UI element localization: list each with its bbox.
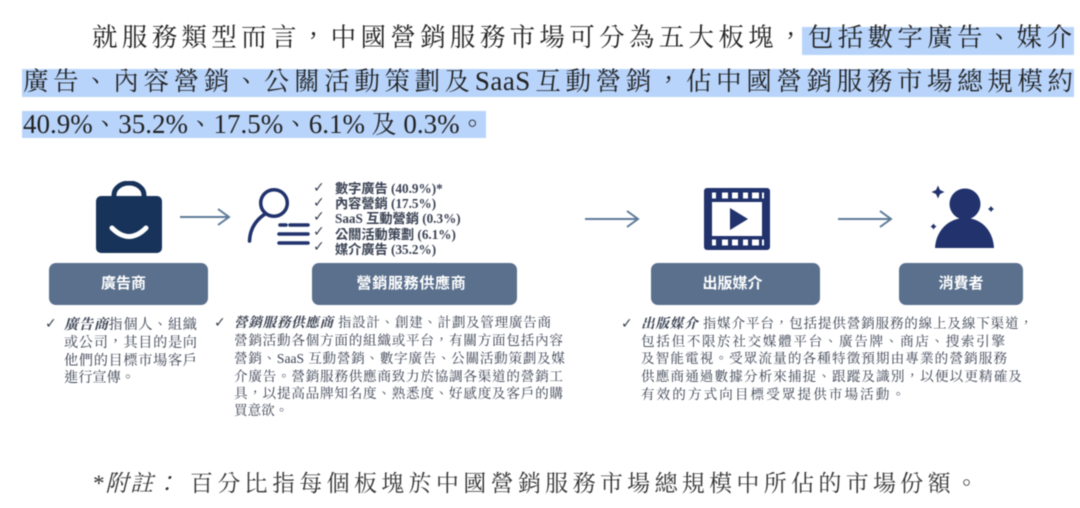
footnote: 百分比指每個板塊於中國營銷服務市場總規模中所佔的市場份額。 <box>190 471 978 496</box>
heading paragraph <box>22 23 1073 139</box>
icon: shopping bag <box>95 180 163 254</box>
label box: marketing service provider: 營銷服務供應商 <box>357 275 466 292</box>
checklist: service types: 媒介廣告 (35.2%) <box>335 242 436 257</box>
footnote: *附註： <box>92 471 178 496</box>
text block: publishing media description: 包括但不限於社交媒體平台、廣告牌、商店、搜索引擎 <box>641 334 1005 349</box>
label box: advertiser: 廣告商 <box>101 275 146 292</box>
heading paragraph: 就服務類型而言，中國營銷服務市場可分為五大板塊，包括數字廣告、媒介 <box>92 23 1072 52</box>
text block: advertiser description: 進行宣傳。 <box>64 370 135 386</box>
checklist: service types: 公關活動策劃 (6.1%) <box>335 227 456 242</box>
text block: advertiser description: 他們的目標市場客戶 <box>64 353 197 369</box>
text block: provider description: 買意欲。 <box>234 403 288 418</box>
checklist: service types: ✓ <box>313 239 325 255</box>
text block: provider description: 營銷服務供應商 指設計、創建、計劃及管理廣告商 <box>234 315 551 330</box>
text block: provider description: ✓ <box>214 315 226 331</box>
text block: advertiser description: 廣告商指個人、組織 <box>64 317 197 333</box>
checklist: service types: ✓ <box>313 224 325 240</box>
heading paragraph: 廣告、內容營銷、公關活動策劃及SaaS互動營銷，佔中國營銷服務市場總規模約 <box>23 66 1073 96</box>
text block: advertiser description <box>45 316 197 386</box>
text block: provider description <box>214 314 565 418</box>
text block: provider description: 具，以提高品牌知名度、熟悉度、好感度及客戶的購 <box>234 386 563 401</box>
checklist: service types: 內容營銷 (17.5%) <box>335 196 436 211</box>
heading paragraph: 40.9%、35.2%、17.5%、6.1% 及 0.3%。 <box>23 109 485 139</box>
text block: publishing media description: ✓ <box>621 316 633 332</box>
text block: provider description: 營銷、SaaS 互動營銷、數字廣告、公關活動策劃及媒 <box>234 351 565 366</box>
checklist: service types: ✓ <box>313 180 325 196</box>
text block: publishing media description <box>621 315 1033 402</box>
text block: advertiser description: 或公司，其目的是向 <box>64 335 197 351</box>
icon: film with play button <box>703 187 771 251</box>
checklist: service types: ✓ <box>313 209 325 225</box>
label box: advertiser <box>49 263 208 305</box>
checklist: service types: SaaS 互動營銷 (0.3%) <box>335 211 461 226</box>
icon: person with lines <box>247 187 310 246</box>
label box: publishing media <box>651 263 820 305</box>
text block: provider description: 營銷活動各個方面的組織或平台，有關方面包括內容 <box>234 333 563 348</box>
text block: provider description: 介廣告。營銷服務供應商致力於協調各渠道的營銷工 <box>234 369 563 384</box>
arrow: media to consumer <box>837 210 893 228</box>
label box: consumer: 消費者 <box>938 275 984 292</box>
text block: publishing media description: 及智能電視。受眾流量的各種特徵預期由專業的營銷服務 <box>641 351 1007 366</box>
text block: advertiser description: ✓ <box>45 316 57 332</box>
text block: publishing media description: 有效的方式向目標受眾提供市場活動。 <box>641 387 905 402</box>
text block: publishing media description: 供應商通過數據分析來捕捉、跟蹤及識別，以便以更精確及 <box>641 369 1022 384</box>
highlight: selected text background <box>22 26 1074 138</box>
checklist: service types: 數字廣告 (40.9%)* <box>335 181 443 196</box>
arrow: provider to media <box>584 210 640 228</box>
checklist: service types: ✓ <box>313 195 325 211</box>
label box: consumer <box>899 263 1023 305</box>
arrow: advertiser to provider <box>179 208 231 226</box>
text block: publishing media description: 出版媒介 指媒介平台，包括提供營銷服務的線上及線下渠道， <box>641 316 1033 331</box>
label box: publishing media: 出版媒介 <box>702 275 762 292</box>
icon: consumer with sparkles <box>930 185 995 249</box>
checklist: service types <box>313 180 461 258</box>
label box: marketing service provider <box>312 263 517 305</box>
